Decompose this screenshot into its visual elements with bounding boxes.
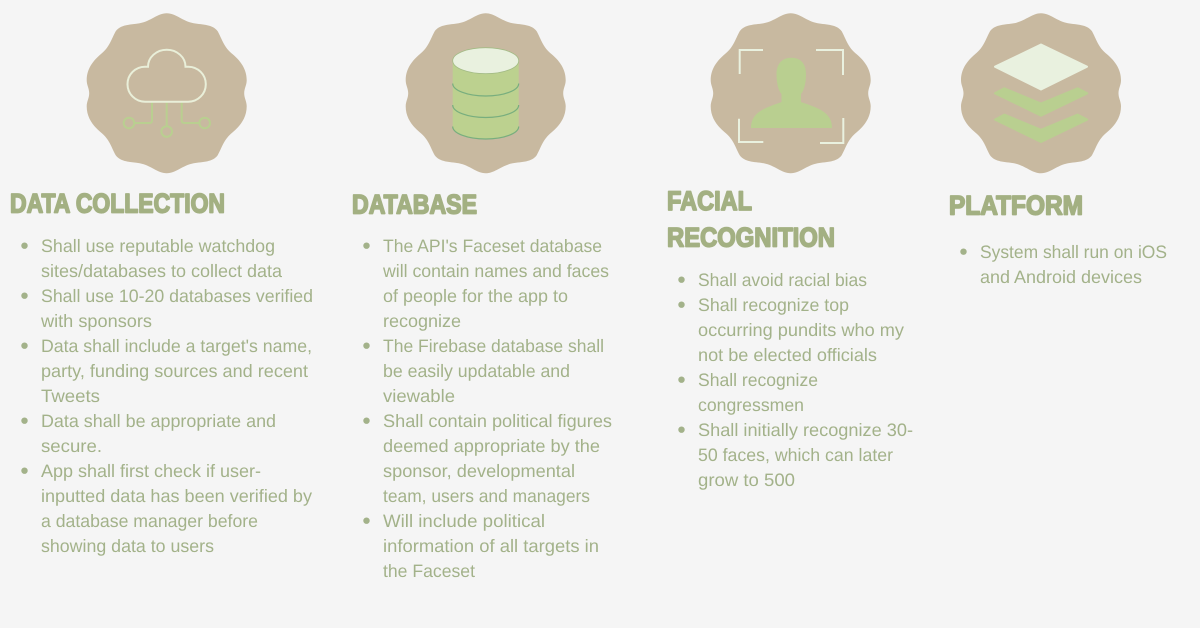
text block: database requirements: Shall contain political figures	[383, 411, 612, 431]
text block: facial recognition requirements: Shall recognize	[698, 370, 818, 390]
text block: database requirements: will contain names and faces	[382, 261, 609, 281]
panel: data collection	[10, 13, 313, 556]
text block: data collection requirements: sites/databases to collect data	[41, 261, 283, 281]
text block: database requirements: deemed appropriate by the	[383, 436, 600, 456]
text block: facial recognition requirements: Shall recognize top	[698, 295, 849, 315]
text block: data collection requirements: Shall use 10-20 databases verified	[41, 286, 313, 306]
text block: data collection requirements: secure.	[41, 436, 102, 456]
panel: facial recognition	[667, 13, 913, 490]
text block: database requirements: team, users and managers	[383, 486, 590, 506]
text block: database requirements: The API's Faceset database	[383, 236, 602, 256]
text block: database requirements: be easily updatable and	[383, 361, 570, 381]
text block: database requirements: viewable	[383, 386, 455, 406]
text block: data collection requirements	[21, 236, 313, 556]
text block: data collection requirements: party, funding sources and recent	[41, 361, 308, 381]
text block: facial recognition requirements: not be elected officials	[698, 345, 877, 365]
text block: database requirements	[363, 236, 612, 581]
heading: facial recognition	[667, 186, 835, 253]
text block: platform requirements: System shall run on iOS	[980, 242, 1167, 262]
text block: database requirements: information of all targets in	[383, 536, 599, 556]
text block: facial recognition requirements: occurring pundits who my	[698, 320, 904, 340]
text block: facial recognition requirements: 50 faces, which can later	[698, 445, 893, 465]
text block: data collection requirements: Data shall include a target's name,	[41, 336, 312, 356]
text block: data collection requirements: Data shall be appropriate and	[41, 411, 276, 431]
text block: data collection requirements: App shall first check if user-	[41, 461, 261, 481]
heading: facial recognition: FACIAL	[667, 186, 752, 216]
text block: data collection requirements: inputted data has been verified by	[41, 486, 312, 506]
text block: database requirements: sponsor, developmental	[383, 461, 575, 481]
text block: data collection requirements: a database manager before	[41, 511, 258, 531]
heading: database: DATABASE	[352, 190, 477, 220]
icon: database cylinder badge	[406, 13, 566, 173]
text block: facial recognition requirements: grow to 500	[698, 470, 795, 490]
heading: facial recognition: RECOGNITION	[667, 223, 835, 253]
icon: face scan badge	[711, 13, 871, 173]
text block: facial recognition requirements	[678, 270, 913, 490]
text block: data collection requirements: showing data to users	[41, 536, 214, 556]
text block: data collection requirements: with sponsors	[40, 311, 152, 331]
text block: data collection requirements: Shall use reputable watchdog	[41, 236, 275, 256]
text block: facial recognition requirements: congressmen	[698, 395, 804, 415]
panel: platform	[949, 13, 1167, 287]
panel: database	[352, 13, 612, 581]
icon: cloud network badge	[87, 13, 247, 173]
text block: database requirements: recognize	[383, 311, 461, 331]
icon: stacked layers badge	[961, 13, 1121, 173]
heading: data collection: DATA COLLECTION	[10, 188, 225, 218]
text block: data collection requirements: Tweets	[41, 386, 100, 406]
text block: database requirements: The Firebase database shall	[383, 336, 604, 356]
heading: platform: PLATFORM	[949, 190, 1083, 220]
text block: platform requirements	[960, 242, 1167, 287]
text block: facial recognition requirements: Shall initially recognize 30-	[698, 420, 913, 440]
text block: database requirements: of people for the app to	[383, 286, 568, 306]
text block: platform requirements: and Android devices	[980, 267, 1142, 287]
text block: facial recognition requirements: Shall avoid racial bias	[698, 270, 867, 290]
text block: database requirements: Will include political	[383, 511, 545, 531]
text block: database requirements: the Faceset	[383, 561, 475, 581]
